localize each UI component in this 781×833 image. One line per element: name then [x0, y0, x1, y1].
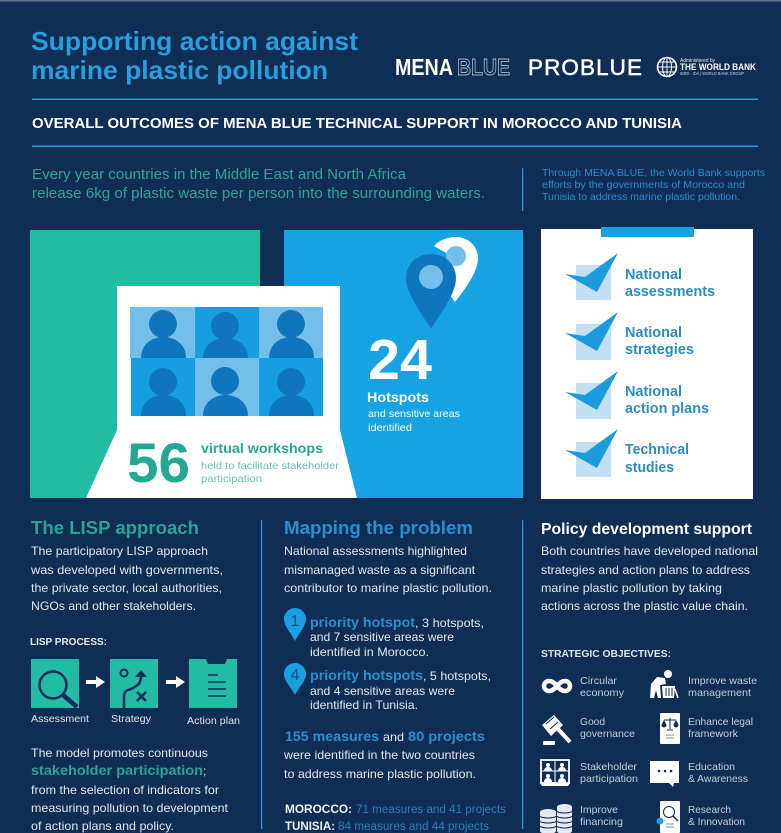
- text block: intro: the private sector, local authorities,: [31, 581, 222, 595]
- text block: model: of action plans and policy.: [31, 819, 174, 833]
- text block: measures: were identified in the two countries: [283, 748, 475, 762]
- text block: Morocco hotspots: priority hotspot: [310, 615, 416, 630]
- logo: The World Bank: [658, 58, 756, 76]
- icon: strategy: [110, 659, 158, 708]
- objective: improve financing: Improve: [580, 804, 618, 816]
- text block: Tunisia hotspots: [310, 668, 491, 712]
- intro text: [32, 167, 485, 202]
- logo: The World Bank: Administered by: [680, 58, 715, 64]
- text block: Morocco hotspots: and 7 sensitive areas were: [310, 630, 454, 644]
- heading: Mapping the problem: [284, 518, 473, 538]
- objective: circular economy: [544, 675, 625, 699]
- text block: Tunisia hotspots: and 4 sensitive areas were: [310, 684, 455, 698]
- label: hotspots: and sensitive areas: [368, 408, 460, 420]
- label: LISP process: LISP PROCESS:: [30, 636, 107, 648]
- check item: technical studies: studies: [625, 460, 674, 476]
- check item: national action plans: [565, 371, 709, 419]
- text block: intro: NGOs and other stakeholders.: [31, 599, 196, 613]
- objective: legal framework: [660, 713, 753, 744]
- objective: research and innovation: [656, 801, 745, 833]
- text block: Morocco hotspots: [310, 615, 484, 659]
- objective: research and innovation: Research: [688, 804, 731, 816]
- text block: policy: Both countries have developed national: [541, 544, 758, 558]
- check item: technical studies: [565, 429, 689, 477]
- subtitle: OVERALL OUTCOMES OF MENA BLUE TECHNICAL SUPPORT IN MOROCCO AND TUNISIA: [32, 116, 683, 132]
- intro side text: efforts by the governments of Morocco and: [542, 179, 745, 191]
- text block: model: [31, 746, 229, 833]
- objective: stakeholder participation: Stakeholder: [580, 761, 638, 773]
- objective: good governance: Good: [580, 716, 605, 728]
- logo: MENA BLUE: [395, 54, 510, 80]
- arrow: [86, 676, 105, 688]
- text block: measures: and: [383, 730, 404, 744]
- label: virtual workshops: held to facilitate stakeholder: [201, 460, 340, 472]
- text block: model: ;: [203, 764, 206, 778]
- panel: hotspots: [284, 230, 523, 498]
- objective: improve financing: financing: [580, 816, 623, 828]
- panel: checklist: [541, 227, 753, 499]
- column: mapping the problem: [283, 518, 506, 833]
- objective: good governance: [542, 715, 635, 745]
- column: LISP approach: [30, 518, 240, 833]
- text block: country totals: 84 measures and 44 projects: [338, 821, 489, 833]
- text block: measures: [283, 729, 485, 781]
- text block: policy: marine plastic pollution by taking: [541, 581, 722, 595]
- check item: national assessments: National: [625, 267, 682, 283]
- text block: intro: The participatory LISP approach: [31, 544, 208, 558]
- check item: national strategies: [565, 312, 694, 360]
- heading: The LISP approach: [31, 518, 199, 538]
- text block: Tunisia hotspots: , 5 hotspots,: [423, 669, 491, 683]
- process labels: Strategy: [111, 713, 152, 725]
- objective: stakeholder participation: participation: [580, 773, 638, 785]
- title: Supporting action against: [31, 26, 358, 56]
- text block: Morocco hotspots: , 3 hotspots,: [415, 616, 484, 630]
- text block: Morocco hotspots: identified in Morocco.: [310, 645, 429, 659]
- heading: Policy development support: [541, 521, 753, 538]
- icon: pin 1: [284, 608, 306, 641]
- title: marine plastic pollution: [31, 55, 328, 85]
- process labels: [31, 713, 240, 727]
- intro side text: Tunisia to address marine plastic pollution.: [542, 191, 740, 203]
- text block: country totals: TUNISIA:: [285, 821, 335, 833]
- text block: country totals: [285, 804, 506, 833]
- label: hotspots: Hotspots: [367, 390, 429, 405]
- text block: model: stakeholder participation: [31, 763, 203, 778]
- check item: national action plans: National: [625, 384, 682, 400]
- process labels: Assessment: [31, 713, 89, 725]
- number: 56 workshops: 56: [127, 431, 190, 494]
- text block: measures: 155 measures: [285, 729, 379, 744]
- text block: measures: 80 projects: [408, 729, 485, 744]
- objective: stakeholder participation: [540, 760, 638, 786]
- label: virtual workshops: virtual workshops: [201, 441, 323, 456]
- check item: national strategies: strategies: [625, 342, 694, 358]
- objective: circular economy: economy: [580, 687, 625, 699]
- process labels: Action plan: [187, 715, 240, 727]
- objective: waste management: [650, 670, 757, 699]
- objective: improve financing: [540, 804, 623, 833]
- text block: model: measuring pollution to development: [31, 801, 229, 815]
- objective: legal framework: framework: [688, 728, 739, 740]
- intro text: Every year countries in the Middle East and North Africa: [32, 167, 407, 183]
- label: virtual workshops: [201, 441, 340, 485]
- icon: action plan: [189, 659, 237, 708]
- objective: circular economy: Circular: [580, 675, 618, 687]
- logo: MENA BLUE: MENA: [395, 54, 453, 80]
- text block: country totals: MOROCCO:: [285, 804, 352, 816]
- icon: location pins: [406, 237, 478, 329]
- label: hotspots: identified: [368, 422, 412, 434]
- intro side text: Through MENA BLUE, the World Bank supports: [542, 167, 765, 179]
- text block: policy: actions across the plastic value chain.: [541, 599, 748, 613]
- video call grid: [130, 307, 323, 416]
- check item: national assessments: [565, 253, 715, 300]
- text block: assessments: [284, 544, 492, 595]
- text block: intro: was developed with governments,: [30, 563, 223, 577]
- text block: measures: to address marine plastic pollution.: [284, 767, 476, 781]
- intro text: release 6kg of plastic waste per person into the surrounding waters.: [32, 186, 485, 202]
- text block: assessments: National assessments highlighted: [284, 544, 467, 558]
- icon: pin 1: 1: [291, 613, 300, 630]
- check item: national strategies: National: [625, 325, 682, 341]
- label: hotspots: [367, 390, 460, 434]
- label: virtual workshops: participation: [201, 473, 262, 485]
- panel: green background: [30, 230, 260, 498]
- icon: pin 4: [284, 663, 306, 695]
- objective: waste management: management: [688, 687, 751, 699]
- text block: Tunisia hotspots: priority hotspots: [310, 668, 423, 683]
- logo: The World Bank: IBRD · IDA | WORLD BANK GROUP: [680, 71, 744, 76]
- text block: model: The model promotes continuous: [31, 746, 208, 760]
- text block: policy: [541, 544, 758, 613]
- label: strategic objectives: STRATEGIC OBJECTIVES:: [541, 648, 671, 660]
- icon: pin 4: 4: [291, 667, 300, 684]
- text block: policy: strategies and action plans to address: [541, 563, 750, 577]
- objective: education and awareness: Education: [688, 761, 735, 773]
- title: [31, 26, 358, 85]
- objective: legal framework: Enhance legal: [688, 716, 753, 728]
- text block: model: from the selection of indicators for: [31, 783, 219, 797]
- logo: The World Bank: THE WORLD BANK: [680, 62, 756, 72]
- laptop with virtual workshops: [86, 286, 357, 498]
- arrow: [166, 676, 185, 688]
- text block: assessments: mismanaged waste as a significant: [284, 563, 476, 577]
- objective: education and awareness: & Awareness: [688, 773, 748, 785]
- intro side text: [542, 167, 765, 203]
- logo: MENA BLUE: BLUE: [457, 54, 510, 80]
- check item: national action plans: action plans: [625, 401, 709, 417]
- text block: assessments: contributor to marine plastic pollution.: [284, 581, 492, 595]
- objective: research and innovation: & Innovation: [688, 816, 745, 828]
- check item: national assessments: assessments: [625, 284, 715, 300]
- icon: assessment: [31, 659, 79, 708]
- check item: technical studies: Technical: [625, 442, 689, 458]
- objective: education and awareness: [650, 761, 748, 787]
- column: policy development support: [540, 521, 758, 833]
- objective: good governance: governance: [580, 728, 635, 740]
- text block: intro: [30, 544, 223, 613]
- logo: PROBLUE: PROBLUE: [528, 55, 642, 80]
- text block: Tunisia hotspots: identified in Tunisia.: [310, 698, 418, 712]
- logos: [395, 54, 756, 80]
- objective: waste management: Improve waste: [688, 675, 757, 687]
- text block: country totals: 71 measures and 41 projects: [356, 804, 506, 816]
- number: 24 hotspots: 24: [368, 328, 432, 392]
